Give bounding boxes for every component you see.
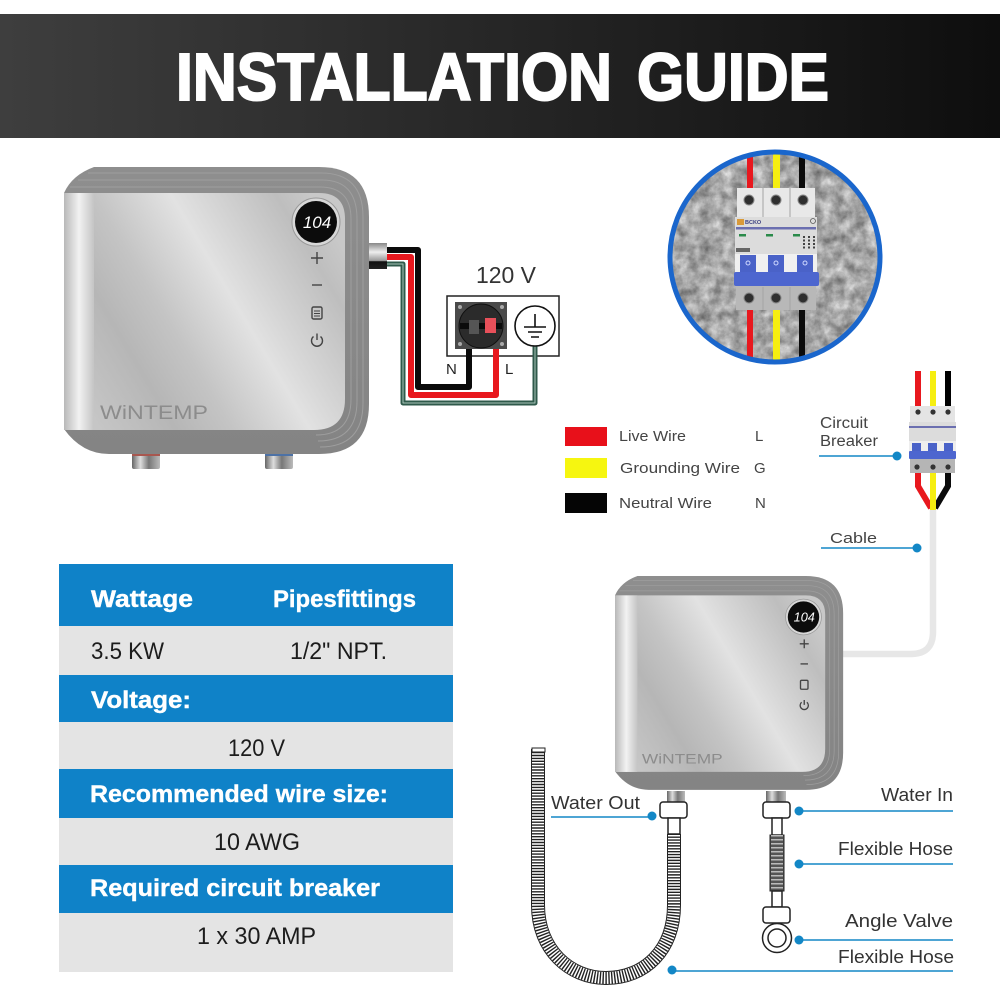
specification table: 1 x 30 AMP bbox=[197, 923, 316, 950]
specification table: Wattage bbox=[91, 586, 193, 613]
specification table: Recommended wire size: bbox=[90, 781, 388, 808]
ground symbol bbox=[515, 306, 555, 346]
callouts: water and hose labels bbox=[551, 785, 954, 974]
callouts: water and hose labels: Flexible Hose bbox=[838, 839, 953, 859]
wire colour legend: G bbox=[754, 460, 766, 477]
callout: circuit breaker: Breaker bbox=[820, 433, 878, 450]
120 V socket box bbox=[446, 262, 555, 378]
water heater small bbox=[615, 576, 843, 790]
specification table: 120 V bbox=[228, 735, 285, 762]
wires to socket bbox=[387, 250, 535, 403]
cable gland bbox=[369, 243, 387, 269]
specification table: Voltage: bbox=[91, 687, 191, 714]
socket bbox=[455, 302, 507, 349]
socket box frame bbox=[447, 296, 559, 356]
callout: cable: Cable bbox=[830, 530, 877, 547]
wire colour legend bbox=[565, 427, 766, 513]
display bbox=[292, 198, 340, 246]
left fitting and long flexible hose bbox=[532, 748, 687, 978]
breaker bbox=[734, 188, 819, 310]
wire colour legend: Live Wire bbox=[619, 428, 686, 445]
callout: circuit breaker: Circuit bbox=[820, 415, 869, 432]
specification table: 10 AWG bbox=[214, 829, 300, 856]
heater unit with wiring bbox=[64, 167, 559, 469]
callout: cable bbox=[821, 530, 922, 552]
120 V socket box: 120 V bbox=[476, 262, 537, 288]
callout: circuit breaker bbox=[819, 415, 902, 460]
logo: WiNTEMP bbox=[100, 403, 208, 424]
control icons bbox=[311, 252, 323, 346]
title banner bbox=[0, 14, 1000, 138]
installation diagram bbox=[532, 371, 956, 978]
120 V socket box: L bbox=[505, 361, 513, 378]
specification table: 3.5 KW bbox=[91, 638, 164, 665]
specification table: 1/2" NPT. bbox=[290, 638, 387, 665]
callouts: water and hose labels: Flexible Hose bbox=[838, 947, 954, 967]
white cable bbox=[840, 505, 933, 654]
wire colour legend: Grounding Wire bbox=[620, 460, 740, 477]
wire colour legend: Neutral Wire bbox=[619, 495, 712, 512]
water heater bbox=[64, 167, 369, 454]
wire colour legend: L bbox=[755, 428, 763, 445]
water heater small: 104 bbox=[794, 610, 815, 624]
callouts: water and hose labels: Water In bbox=[881, 785, 953, 805]
callouts: water and hose labels: Angle Valve bbox=[845, 911, 953, 931]
small breaker with wires bbox=[909, 371, 956, 510]
callouts: water and hose labels: Water Out bbox=[551, 793, 640, 813]
right fitting, short hose and angle valve ring bbox=[762, 791, 792, 952]
wire colour legend: N bbox=[755, 495, 766, 512]
title banner: GUIDE bbox=[637, 40, 829, 115]
title banner: INSTALLATION bbox=[176, 40, 612, 115]
display: 104 bbox=[303, 213, 331, 232]
circuit breaker close-up bbox=[668, 150, 882, 364]
water fittings bbox=[132, 453, 293, 469]
specification table: Pipesfittings bbox=[273, 586, 416, 613]
120 V socket box: N bbox=[446, 361, 457, 378]
breaker: BCKO bbox=[745, 220, 762, 226]
water heater small: WiNTEMP bbox=[642, 752, 723, 768]
specification table: Required circuit breaker bbox=[90, 875, 380, 902]
specification table bbox=[59, 564, 453, 972]
